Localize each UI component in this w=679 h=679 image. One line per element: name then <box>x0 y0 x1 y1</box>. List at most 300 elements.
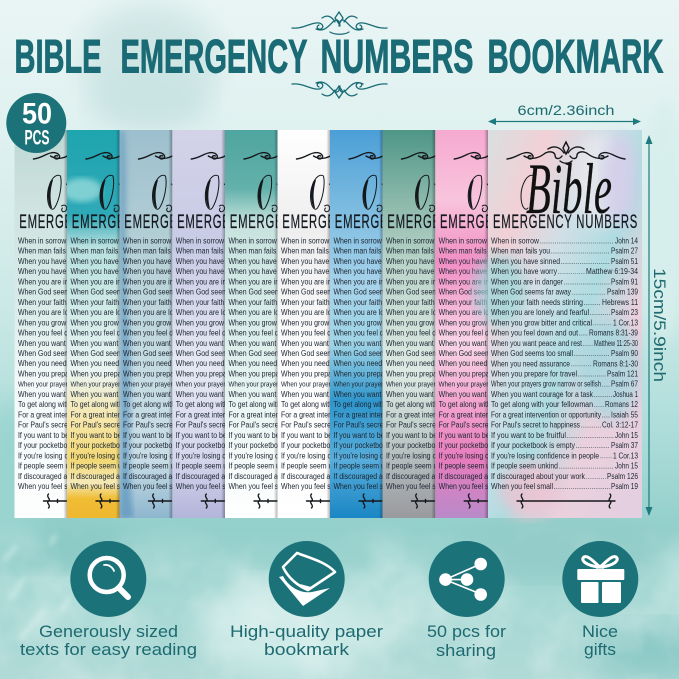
script word: Bible: Bible <box>526 149 612 229</box>
bookmark 1: When you are lonely <box>18 308 82 317</box>
title: NUMBERS <box>320 30 474 82</box>
bookmark 7: When you grow bitter <box>333 318 400 327</box>
bookmark 8: When you need assurance <box>386 359 469 368</box>
verse list: left phrases: When you need assurance <box>491 359 570 368</box>
verse list: references: Psalm 126 <box>607 472 638 481</box>
bookmark 9: When you want courage <box>439 389 514 399</box>
dimension: height arrow: 15cm/5.9inch <box>650 268 669 382</box>
verse list: left phrases: To get along with your fellowman <box>491 400 593 409</box>
verse list: left phrases: If discouraged about your work <box>491 472 586 481</box>
bookmark 8: When you have worry <box>386 267 453 276</box>
bookmark 2: When in sorrow <box>70 236 119 246</box>
bookmark 7: When you want peace <box>333 338 402 348</box>
bookmark 7: If you want to be <box>333 430 384 440</box>
bookmark 3: If people seem unkind <box>123 461 191 471</box>
bookmark 4: For a great intervention <box>176 410 248 420</box>
bookmark 9: If you want to be <box>439 430 490 440</box>
title ornament: bottom <box>292 82 387 98</box>
title: BIBLE <box>14 30 102 82</box>
icon: paper sheets <box>269 541 345 617</box>
bookmark 3: If your pocketbook <box>123 441 180 450</box>
bookmark 2: For Paul's secret to <box>70 420 130 430</box>
bookmark 1: When you prepare <box>18 369 75 379</box>
bookmark 3: When you have worry <box>123 267 190 276</box>
bookmark 8: To get along with <box>386 400 438 409</box>
verse list: left phrases: When you have worry <box>491 267 557 276</box>
bookmark 3: When you want courage <box>123 389 198 399</box>
bookmark 1: When you want peace <box>18 338 87 348</box>
bookmark 3: If you want to be <box>123 430 174 440</box>
bookmark 4: If discouraged about <box>176 471 240 481</box>
bookmark 4: When you grow bitter <box>176 318 242 327</box>
bookmark 8: If your pocketbook <box>386 441 443 450</box>
verse list: left phrases: When man fails you <box>491 247 550 256</box>
bookmark 9: When you are lonely <box>439 308 502 317</box>
bookmark 2: When you prepare <box>70 369 128 379</box>
verse list: left phrases: When in sorrow <box>491 236 539 246</box>
bookmark 1: When you have worry <box>18 267 85 276</box>
bookmark 9: When God seems far <box>439 287 505 297</box>
bookmark 7: When in sorrow <box>333 236 382 246</box>
bookmark 7: When your prayers grow <box>333 381 402 389</box>
bookmark 8: When you feel down <box>386 328 449 338</box>
feature: paper <box>230 541 383 659</box>
bookmark 2: When you feel small <box>70 482 133 491</box>
bookmark 1: When you need assurance <box>18 359 101 368</box>
verse list: references: John 15 <box>615 462 638 471</box>
dimension: width arrow <box>488 102 641 125</box>
bookmark 2: When your faith needs <box>70 297 140 307</box>
bookmark 2: If people seem unkind <box>70 461 138 471</box>
bookmark 6: If you want to be <box>281 430 332 440</box>
verse list: left phrases: If people seem unkind <box>491 462 558 471</box>
bookmark 10: front, full text <box>474 130 642 518</box>
bookmark 5: When you are in danger <box>228 277 303 287</box>
verse list: references: 1 Cor.13 <box>613 318 638 327</box>
bookmark 1: When man fails you <box>18 246 79 256</box>
bookmark 8: When you grow bitter <box>386 318 452 327</box>
badge: 50 pcs <box>6 93 66 153</box>
bookmark 5: When you have worry <box>228 267 296 276</box>
bookmark 8: For Paul's secret to <box>386 420 446 430</box>
bookmark 6: If discouraged about <box>281 471 345 481</box>
bookmark 8: When you want courage <box>386 389 461 399</box>
bookmark 4: When your faith needs <box>176 297 246 307</box>
verse list: references: John 14 <box>615 236 638 246</box>
verse list: left phrases: If you want to be fruitful <box>491 431 566 440</box>
bookmark 9 <box>435 130 488 518</box>
bookmark 1: For a great intervention <box>18 410 90 420</box>
verse list: left phrases <box>491 236 601 491</box>
verse list: references: Psalm 51 <box>611 257 638 266</box>
bookmark 1: When you feel down <box>18 328 81 338</box>
bookmark 5: To get along with <box>228 400 281 409</box>
bookmark 9: When you have sinned <box>439 256 509 266</box>
verse list: references: Psalm 19 <box>611 482 638 491</box>
bookmark 9: When you prepare <box>439 369 496 379</box>
bookmark 8 <box>382 130 436 518</box>
bookmark 6: When you have worry <box>281 267 348 276</box>
verse list: references: Hebrews 11 <box>602 298 638 307</box>
feature: gifts <box>562 541 638 659</box>
bookmark 9: To get along with <box>439 400 491 409</box>
bookmark 1: When in sorrow <box>18 236 67 246</box>
verse list: references: Psalm 27 <box>611 247 638 256</box>
bookmark 4: When you have sinned <box>176 256 246 266</box>
bookmark 8: When God seems far <box>386 287 452 297</box>
bookmark 1: When you want courage <box>18 389 93 399</box>
bookmark 7: When you are lonely <box>333 308 397 317</box>
bookmark 2: EMERGENCY NUMBERS <box>72 212 217 233</box>
feature: paper: High-quality paper <box>230 622 383 641</box>
bookmark 7: If discouraged about <box>333 471 397 481</box>
verse list: left phrases: When you have sinned <box>491 257 560 266</box>
bookmark 5 <box>225 130 278 518</box>
bookmark 4: To get along with <box>176 400 228 409</box>
bookmark 1: For Paul's secret to <box>18 420 78 430</box>
bookmark 6: When you are in danger <box>281 277 356 287</box>
bookmark 4: When you want peace <box>176 338 245 348</box>
bookmark 5: When you prepare <box>228 369 286 379</box>
bookmark 9: When you are in danger <box>439 277 513 287</box>
bookmark 7: When you feel small <box>333 482 396 491</box>
verse list: references: Psalm 91 <box>611 277 638 286</box>
bookmark 3: When in sorrow <box>123 236 172 246</box>
bookmark 8: When you want peace <box>386 338 455 348</box>
bookmark 5: When your faith needs <box>228 297 298 307</box>
bookmark 7: For Paul's secret to <box>333 420 393 430</box>
bookmark 3: When you need assurance <box>123 359 206 368</box>
bookmark 9: If discouraged about <box>439 471 502 481</box>
bookmark 4: For Paul's secret to <box>176 420 235 430</box>
bookmark 3: When your prayers grow <box>123 381 191 389</box>
ornament: bookmark footer flourish <box>517 494 615 508</box>
feature: magnifier: Generously sized <box>39 622 178 641</box>
bookmark 9: When you feel down <box>439 328 502 338</box>
verse list: references: John 15 <box>615 431 638 440</box>
bookmark 4: When in sorrow <box>176 236 225 246</box>
verse list: left phrases: When God seems far away <box>491 288 571 297</box>
feature: gifts: gifts <box>584 640 616 659</box>
bookmark 1: If people seem unkind <box>18 461 86 471</box>
verse list: left phrases: When you prepare for travel <box>491 370 577 378</box>
bookmark 1: When you have sinned <box>18 256 89 266</box>
bookmark 2: When man fails you <box>70 246 131 256</box>
bookmark 2: When God seems too <box>70 349 138 358</box>
bookmark 9: When you have worry <box>439 267 506 276</box>
feature: magnifier: texts for easy reading <box>20 640 197 659</box>
verse list: references <box>586 236 638 491</box>
bookmark 2: When you are in danger <box>70 277 145 287</box>
bookmark 8: If discouraged about <box>386 471 450 481</box>
bookmark 6: For a great intervention <box>281 410 353 420</box>
verse list: left phrases: When you are lonely and fearful <box>491 308 589 317</box>
bookmark 3: When you are lonely <box>123 308 187 317</box>
bookmark 5: If people seem unkind <box>228 461 296 471</box>
verse list: left phrases: When you feel down and out <box>491 329 579 338</box>
bookmark 7: When you have worry <box>333 267 401 276</box>
bookmark 2: For a great intervention <box>70 410 142 420</box>
bookmark 6: When you are lonely <box>281 308 345 317</box>
bookmark 1: When your prayers grow <box>18 381 86 389</box>
bookmark 3: When man fails you <box>123 246 184 256</box>
bookmark 8: For a great intervention <box>386 410 458 420</box>
bookmark 2: When you feel down <box>70 328 133 338</box>
bookmark 5: When you feel down <box>228 328 291 338</box>
badge: 50 pcs: PCS <box>24 126 50 150</box>
bookmark 4 <box>172 130 225 518</box>
bookmark 2 <box>67 130 120 518</box>
verse list: references: Joshua 1 <box>613 390 638 399</box>
bookmark 1: When God seems too <box>18 349 85 358</box>
bookmark 7: When you need assurance <box>333 359 416 368</box>
bookmark 9: For Paul's secret to <box>439 420 498 430</box>
bookmark 4: When you need assurance <box>176 359 258 368</box>
bookmark 9: When you grow bitter <box>439 318 505 327</box>
bookmark 3: For a great intervention <box>123 410 195 420</box>
feature: sharing <box>427 541 506 660</box>
bookmark 6: When you have sinned <box>281 256 352 266</box>
bookmark 8: If people seem unkind <box>386 461 454 471</box>
bookmark 5: EMERGENCY NUMBERS <box>230 212 375 233</box>
bookmark 4: When you are in danger <box>176 277 250 287</box>
bookmark 7: When man fails you <box>333 246 394 256</box>
verse list: references: Psalm 37 <box>611 441 638 450</box>
bookmark 7: For a great intervention <box>333 410 405 420</box>
bookmark 1: When you feel small <box>18 482 81 491</box>
bookmark 9: When your prayers grow <box>439 381 507 389</box>
bookmark 5: If your pocketbook <box>228 441 285 450</box>
bookmark 7: When God seems far <box>333 287 400 297</box>
bookmark 7: When God seems too <box>333 349 401 358</box>
icon: magnifying glass <box>70 541 146 617</box>
bookmark 2: When you have sinned <box>70 256 141 266</box>
title <box>14 30 664 82</box>
title ornament: top <box>292 12 387 34</box>
verse list: references: Romans 8:1-30 <box>593 359 638 368</box>
ornament: bookmark header flourish <box>507 142 625 163</box>
feature: sharing: sharing <box>436 641 496 660</box>
bookmark 1: When you grow bitter <box>18 318 84 327</box>
bookmark 9: EMERGENCY NUMBERS <box>440 212 585 233</box>
bookmark 2: When you want peace <box>70 338 139 348</box>
verse list: references: Psalm 121 <box>607 370 638 378</box>
bookmark 3: If discouraged about <box>123 471 187 481</box>
bookmark 6: If you're losing confidence <box>281 451 361 460</box>
bookmark 5: If you're losing confidence <box>228 451 309 460</box>
dimension: height arrow <box>646 135 669 516</box>
bookmark 7: When you have sinned <box>333 256 404 266</box>
bookmark 5: When man fails you <box>228 246 289 256</box>
bookmark 5: When in sorrow <box>228 236 277 246</box>
bookmark 9: When your faith needs <box>439 297 508 307</box>
bookmark 7: If people seem unkind <box>333 461 401 471</box>
bookmark 5: When you want peace <box>228 338 297 348</box>
bookmark 8: When man fails you <box>386 246 447 256</box>
bookmark 7: If your pocketbook <box>333 441 390 450</box>
bookmark 3: When you want peace <box>123 338 192 348</box>
bookmark 4: When you have worry <box>176 267 243 276</box>
bookmark 9: When you need assurance <box>439 359 521 368</box>
feature: sharing: 50 pcs for <box>427 622 506 641</box>
bookmark 6: When you feel small <box>281 482 344 491</box>
verse list: references: Isaiah 55 <box>611 410 638 419</box>
bookmark 2: If discouraged about <box>70 471 134 481</box>
bookmark 6: When your prayers grow <box>281 381 349 389</box>
bookmark 5: For Paul's secret to <box>228 420 288 430</box>
icon: gift box <box>562 541 638 617</box>
verse list: references: Psalm 139 <box>607 288 638 297</box>
bookmark 8: When you have sinned <box>386 256 457 266</box>
verse list: left phrases: When you are in danger <box>491 277 563 286</box>
bookmark 6: For Paul's secret to <box>281 420 341 430</box>
verse list: references: Psalm 23 <box>611 308 638 317</box>
bookmark 2: When you are lonely <box>70 308 134 317</box>
bookmark 1: If discouraged about <box>18 471 82 481</box>
bookmark 5: When you need assurance <box>228 359 311 368</box>
verse list: left phrases: If you're losing confidence in people <box>491 451 599 460</box>
bookmark 2: If your pocketbook <box>70 441 127 450</box>
bookmark 1 <box>14 130 67 518</box>
bookmark 6 <box>278 130 330 518</box>
bookmark 3: When your faith needs <box>123 297 193 307</box>
bookmark 6: When man fails you <box>281 246 342 256</box>
verse list: references: 1 Cor.13 <box>613 451 638 460</box>
bookmark 9: If your pocketbook <box>439 441 496 450</box>
bookmark 9: When in sorrow <box>439 236 487 246</box>
bookmark 7: When you want courage <box>333 389 408 399</box>
verse list: references: Psalm 90 <box>611 349 638 358</box>
verse list: references: Romans 12 <box>605 400 638 409</box>
bookmark 3: When you feel small <box>123 482 186 491</box>
bookmark 4: When you feel small <box>176 482 239 491</box>
bookmark 5: When you want courage <box>228 389 303 399</box>
dimension: width arrow: 6cm/2.36inch <box>518 102 614 118</box>
bookmark 7: When your faith needs <box>333 297 403 307</box>
bookmark 8: When your prayers grow <box>386 381 454 389</box>
bookmark 6: When your faith needs <box>281 297 351 307</box>
bookmark 8: If you're losing confidence <box>386 451 466 460</box>
bookmark 5: When your prayers grow <box>228 381 297 389</box>
bookmark 8: When you are lonely <box>386 308 450 317</box>
bookmark 3: If you're losing confidence <box>123 451 203 460</box>
verse list: left phrases: For Paul's secret to happiness <box>491 421 580 430</box>
bookmark 4: When you prepare <box>176 369 233 379</box>
bookmark 6: To get along with <box>281 400 333 409</box>
bookmark 9: When you feel small <box>439 482 502 491</box>
bookmark 6: When you prepare <box>281 369 338 379</box>
bookmark 1: When you are in danger <box>18 277 93 287</box>
verse list: references: Col. 3:12-17 <box>602 421 638 430</box>
bookmark 8: When you feel small <box>386 482 449 491</box>
bookmark 3 <box>120 130 172 518</box>
bookmark 8: If you want to be <box>386 430 437 440</box>
bookmark 2: When you grow bitter <box>70 318 137 327</box>
bookmark 8: When in sorrow <box>386 236 435 246</box>
bookmark 7: EMERGENCY NUMBERS <box>335 212 480 233</box>
bookmark 3: When you prepare <box>123 369 180 379</box>
bookmark 9: For a great intervention <box>439 410 511 420</box>
verse list: left phrases: When you want peace and rest <box>491 339 583 348</box>
script word: Bible <box>521 149 612 229</box>
bookmark 7: When you prepare <box>333 369 391 379</box>
verse list: references: Psalm 67 <box>611 380 638 389</box>
bookmark 3: When God seems far <box>123 287 189 297</box>
bookmark 4: When man fails you <box>176 246 237 256</box>
verse list: left phrases: When you feel small <box>491 482 553 491</box>
bookmark 4: When God seems far <box>176 287 242 297</box>
bookmark 6: When God seems too <box>281 349 348 358</box>
bookmark 7: When you are in danger <box>333 277 408 287</box>
verse list: left phrases: When God seems too small <box>491 349 573 358</box>
bookmark 3: When you are in danger <box>123 277 198 287</box>
feature: gifts: Nice <box>582 622 618 641</box>
bookmark 5: When God seems far <box>228 287 295 297</box>
bookmark 5: When God seems too <box>228 349 296 358</box>
bookmark 5: When you feel small <box>228 482 291 491</box>
bookmark 3: When you feel down <box>123 328 186 338</box>
bookmark 7: To get along with <box>333 400 386 409</box>
bookmark 6: When in sorrow <box>281 236 330 246</box>
badge: 50 pcs: 50 <box>22 98 52 130</box>
bookmark 6: When God seems far <box>281 287 347 297</box>
bookmark 6: EMERGENCY NUMBERS <box>282 212 427 233</box>
bookmark 8: When you are in danger <box>386 277 461 287</box>
bookmark 2: When your prayers grow <box>70 381 139 389</box>
bookmark 5: If you want to be <box>228 430 279 440</box>
bookmark 9: If people seem unkind <box>439 461 507 471</box>
verse list: left phrases: If your pocketbook is empty <box>491 441 575 450</box>
bookmark 4: When God seems too <box>176 349 243 358</box>
bookmark 5: When you have sinned <box>228 256 299 266</box>
icon: share nodes <box>429 541 505 617</box>
bookmark 5: When you are lonely <box>228 308 292 317</box>
bookmark 6: When you want peace <box>281 338 350 348</box>
bookmark 3: EMERGENCY NUMBERS <box>124 212 269 233</box>
bookmark 6: When you grow bitter <box>281 318 347 327</box>
bookmark 2: If you're losing confidence <box>70 451 151 460</box>
bookmark 3: For Paul's secret to <box>123 420 183 430</box>
bookmark 2: To get along with <box>70 400 123 409</box>
bookmark 6: If your pocketbook <box>281 441 338 450</box>
verse list: left phrases: When you grow bitter and critical <box>491 318 592 327</box>
bookmark 1: When God seems far <box>18 287 84 297</box>
bookmark 1: If you're losing confidence <box>18 451 98 460</box>
bookmark 4: If you're losing confidence <box>176 451 256 460</box>
bookmark 9: If you're losing confidence <box>439 451 519 460</box>
bookmark 2: If you want to be <box>70 430 121 440</box>
bookmark 4: When you are lonely <box>176 308 239 317</box>
bookmark 9: When you want peace <box>439 338 507 348</box>
feature: paper: bookmark <box>264 640 350 659</box>
bookmark 8: When your faith needs <box>386 297 456 307</box>
bookmark 5: For a great intervention <box>228 410 300 420</box>
bookmark 2: When you want courage <box>70 389 145 399</box>
bookmark 7 <box>330 130 382 518</box>
bookmark 1: To get along with <box>18 400 70 409</box>
bookmark 4: If your pocketbook <box>176 441 233 450</box>
bookmark 4: When you feel down <box>176 328 239 338</box>
bookmark 7: If you're losing confidence <box>333 451 414 460</box>
verse list: left phrases: For a great intervention or opportunity <box>491 410 601 419</box>
bookmark 4: When your prayers grow <box>176 381 244 389</box>
bookmark 8: When you prepare <box>386 369 443 379</box>
bookmark 5: If discouraged about <box>228 471 292 481</box>
bookmark 10: front, full text: EMERGENCY NUMBERS <box>493 212 638 233</box>
bookmark 7: When you feel down <box>333 328 396 338</box>
feature: magnifier <box>20 541 197 659</box>
verse list: references: Matthew 6:19-34 <box>586 267 638 276</box>
